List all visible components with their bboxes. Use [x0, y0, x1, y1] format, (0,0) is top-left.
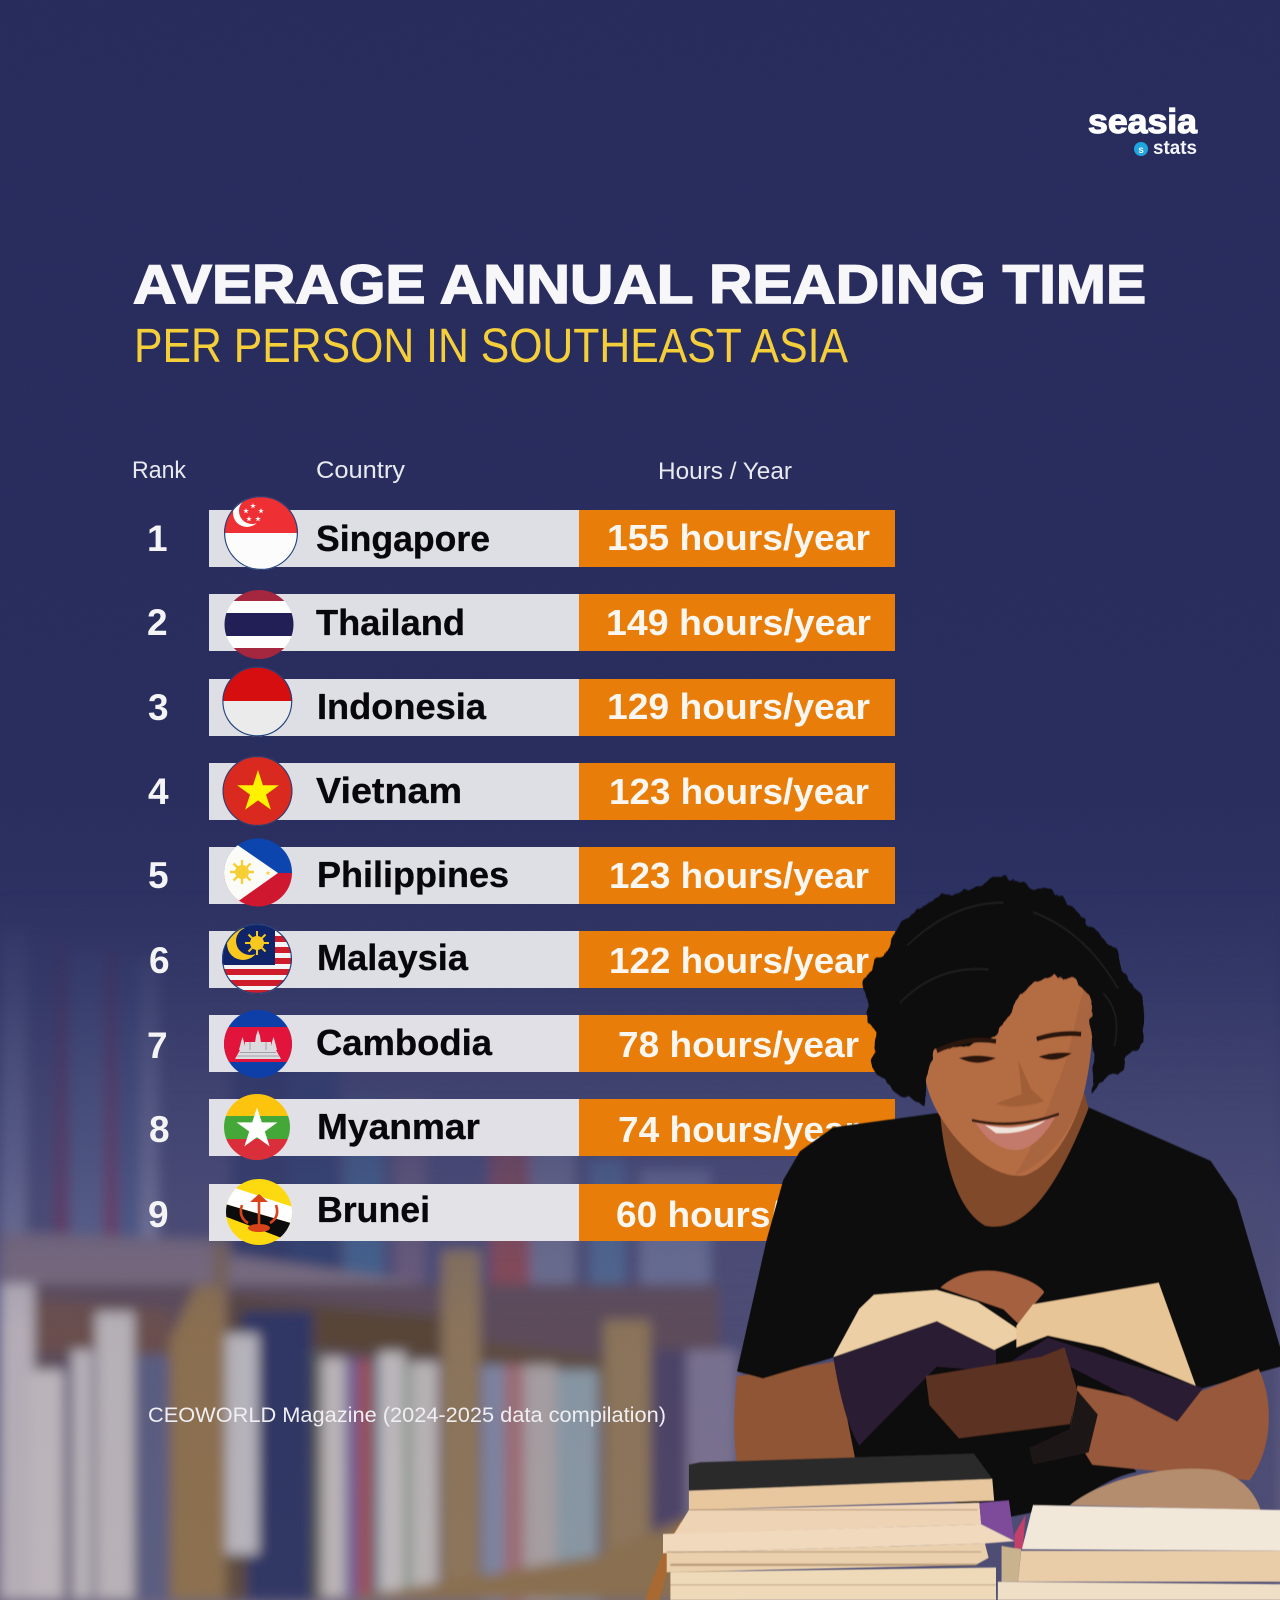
country name: Myanmar: [317, 1106, 480, 1147]
smile: [972, 1114, 1059, 1150]
rank number: 7: [147, 1025, 168, 1066]
knee: [1070, 1469, 1261, 1510]
hours bar: [579, 931, 895, 988]
flag: Vietnam: [222, 756, 294, 828]
row 7: Cambodia: [147, 1010, 895, 1078]
hours value: 60 hours/year: [616, 1194, 857, 1235]
flag: Singapore: [224, 496, 298, 570]
subtitle: PER PERSON IN SOUTHEAST ASIA: [134, 320, 848, 373]
country name: Vietnam: [316, 770, 462, 811]
flag: Brunei: [226, 1179, 292, 1245]
hours bar: [579, 763, 895, 820]
country bar: [209, 679, 579, 736]
hours value: 129 hours/year: [607, 686, 870, 727]
hours value: 78 hours/year: [618, 1024, 859, 1065]
header: country: Country: [316, 457, 405, 484]
country bar: [209, 510, 579, 567]
country name: Indonesia: [317, 686, 487, 727]
cheek shading: [1014, 984, 1093, 1175]
row 5: Philippines: [149, 838, 895, 906]
book back cover: [833, 1321, 1203, 1445]
hours value: 74 hours/year: [618, 1109, 859, 1150]
rank number: 5: [148, 855, 169, 896]
right arm: [1070, 1369, 1269, 1480]
hours bar: [579, 510, 895, 567]
country bar: [209, 1184, 579, 1241]
open book: [833, 1283, 1203, 1445]
hours value: 149 hours/year: [606, 602, 871, 643]
shelf boards: [0, 1232, 212, 1286]
hair: [863, 880, 1145, 1110]
rank number: 2: [147, 602, 168, 643]
flag: Philippines: [224, 838, 292, 906]
background: blurred bookshelf photo: [0, 900, 1280, 1600]
lower hand: [926, 1347, 1077, 1438]
row 3: Indonesia: [148, 666, 895, 737]
rank number: 6: [149, 940, 170, 981]
hours value: 155 hours/year: [607, 517, 870, 558]
country name: Malaysia: [317, 937, 469, 978]
table headers: [132, 457, 792, 485]
logo: seasia stats: [1088, 103, 1198, 159]
hours value: 122 hours/year: [609, 940, 869, 981]
rank number: 9: [148, 1194, 169, 1235]
wristwatch: [1029, 1390, 1098, 1465]
country name: Singapore: [316, 518, 490, 559]
hours bar: [579, 847, 895, 904]
flag: Cambodia: [223, 1010, 293, 1078]
face: [924, 969, 1093, 1176]
right book stack: [998, 1505, 1280, 1600]
hair highlights: [900, 903, 1118, 1046]
rank number: 1: [147, 518, 168, 559]
t-shirt: [737, 1099, 1280, 1520]
left book stack: [663, 1454, 1014, 1600]
left arm: [734, 1357, 870, 1462]
header: rank: Rank: [132, 457, 187, 484]
country name: Thailand: [316, 602, 465, 643]
row 4: Vietnam: [148, 756, 895, 828]
book left page: [833, 1290, 1018, 1357]
books: [0, 1284, 34, 1600]
hours bar: [579, 1015, 895, 1072]
logo wordmark: seasia: [1088, 103, 1198, 141]
hours value: 123 hours/year: [609, 855, 869, 896]
country bar: [209, 1099, 579, 1156]
row 1: Singapore: [147, 496, 895, 570]
country name: Cambodia: [316, 1022, 493, 1063]
hours bar: [579, 594, 895, 651]
header: hours per year: Hours / Year: [658, 458, 792, 485]
rank number: 3: [148, 687, 169, 728]
country name: Philippines: [317, 854, 509, 895]
hours bar: [579, 679, 895, 736]
country bar: [209, 594, 579, 651]
neck: [937, 1056, 1088, 1227]
photo: student reading a book: [644, 880, 1280, 1600]
source note: CEOWORLD Magazine (2024-2025 data compilation): [148, 1404, 666, 1427]
flag: Myanmar: [223, 1093, 291, 1161]
flag: Malaysia: [221, 923, 295, 996]
upper hand: [940, 1271, 1044, 1324]
country bar: [209, 1015, 579, 1072]
book right page: [1016, 1283, 1196, 1386]
wooden chair arm: [644, 1520, 682, 1600]
rank number: 8: [149, 1109, 170, 1150]
hours bar: [579, 1099, 895, 1156]
row 6: Malaysia: [149, 923, 895, 996]
title: AVERAGE ANNUAL READING TIME: [133, 253, 1146, 315]
country bar: [209, 763, 579, 820]
eyes and brows: [937, 1034, 1081, 1063]
logo sub word: stats: [1153, 138, 1197, 159]
hours bar: [579, 1184, 895, 1241]
flag: Indonesia: [222, 666, 294, 737]
country bar: [209, 847, 579, 904]
row 8: Myanmar: [149, 1093, 895, 1161]
rank number: 4: [148, 771, 169, 812]
country bar: [209, 931, 579, 988]
hours value: 123 hours/year: [609, 771, 869, 812]
nose shade: [996, 1060, 1044, 1107]
row 2: Thailand: [147, 590, 895, 660]
flag: Thailand: [224, 590, 294, 660]
country name: Brunei: [317, 1189, 430, 1230]
row 9: Brunei: [149, 1179, 782, 1245]
logo badge: s: [1138, 145, 1144, 156]
upper shelf books: [0, 985, 714, 1290]
